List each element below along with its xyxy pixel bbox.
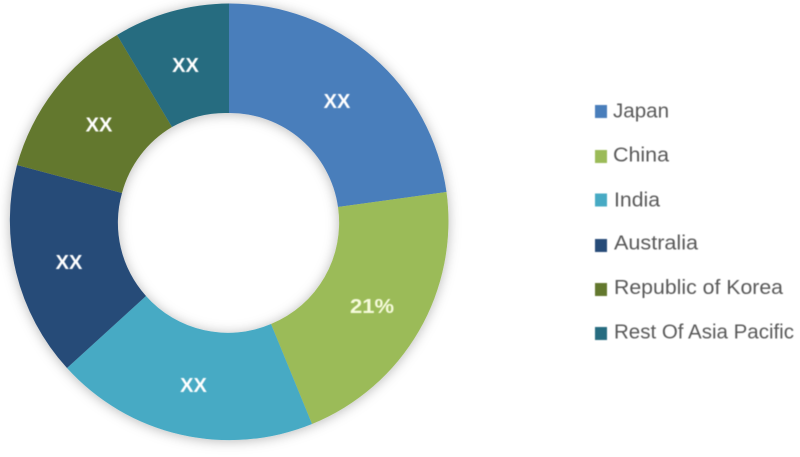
legend item: China	[595, 144, 670, 166]
legend item: China: China	[613, 144, 670, 166]
label: China value: 21%	[350, 296, 394, 318]
legend item: India: India	[614, 190, 661, 212]
legend	[595, 100, 794, 344]
label: Australia value: XX	[56, 252, 83, 274]
segment: Australia	[10, 165, 146, 368]
segment: Republic of Korea	[17, 35, 172, 193]
label: Japan value: XX	[324, 91, 351, 113]
donut chart	[10, 3, 448, 440]
segment: China	[271, 192, 448, 424]
legend item: Japan: Japan	[613, 100, 669, 122]
segment: Rest Of Asia Pacific	[117, 4, 229, 127]
label: India value: XX	[180, 375, 207, 397]
label: Republic of Korea value: XX	[86, 114, 113, 136]
segment: Japan	[229, 3, 446, 207]
donut data labels	[56, 55, 394, 397]
legend item: Republic of Korea: Republic of Korea	[614, 277, 784, 299]
label: Rest Of Asia Pacific value: XX	[172, 55, 199, 77]
legend item: Rest Of Asia Pacific: Rest Of Asia Pacific	[614, 322, 794, 344]
segment: India	[67, 296, 312, 440]
legend item: India	[595, 190, 661, 212]
legend item: Australia: Australia	[614, 232, 699, 254]
